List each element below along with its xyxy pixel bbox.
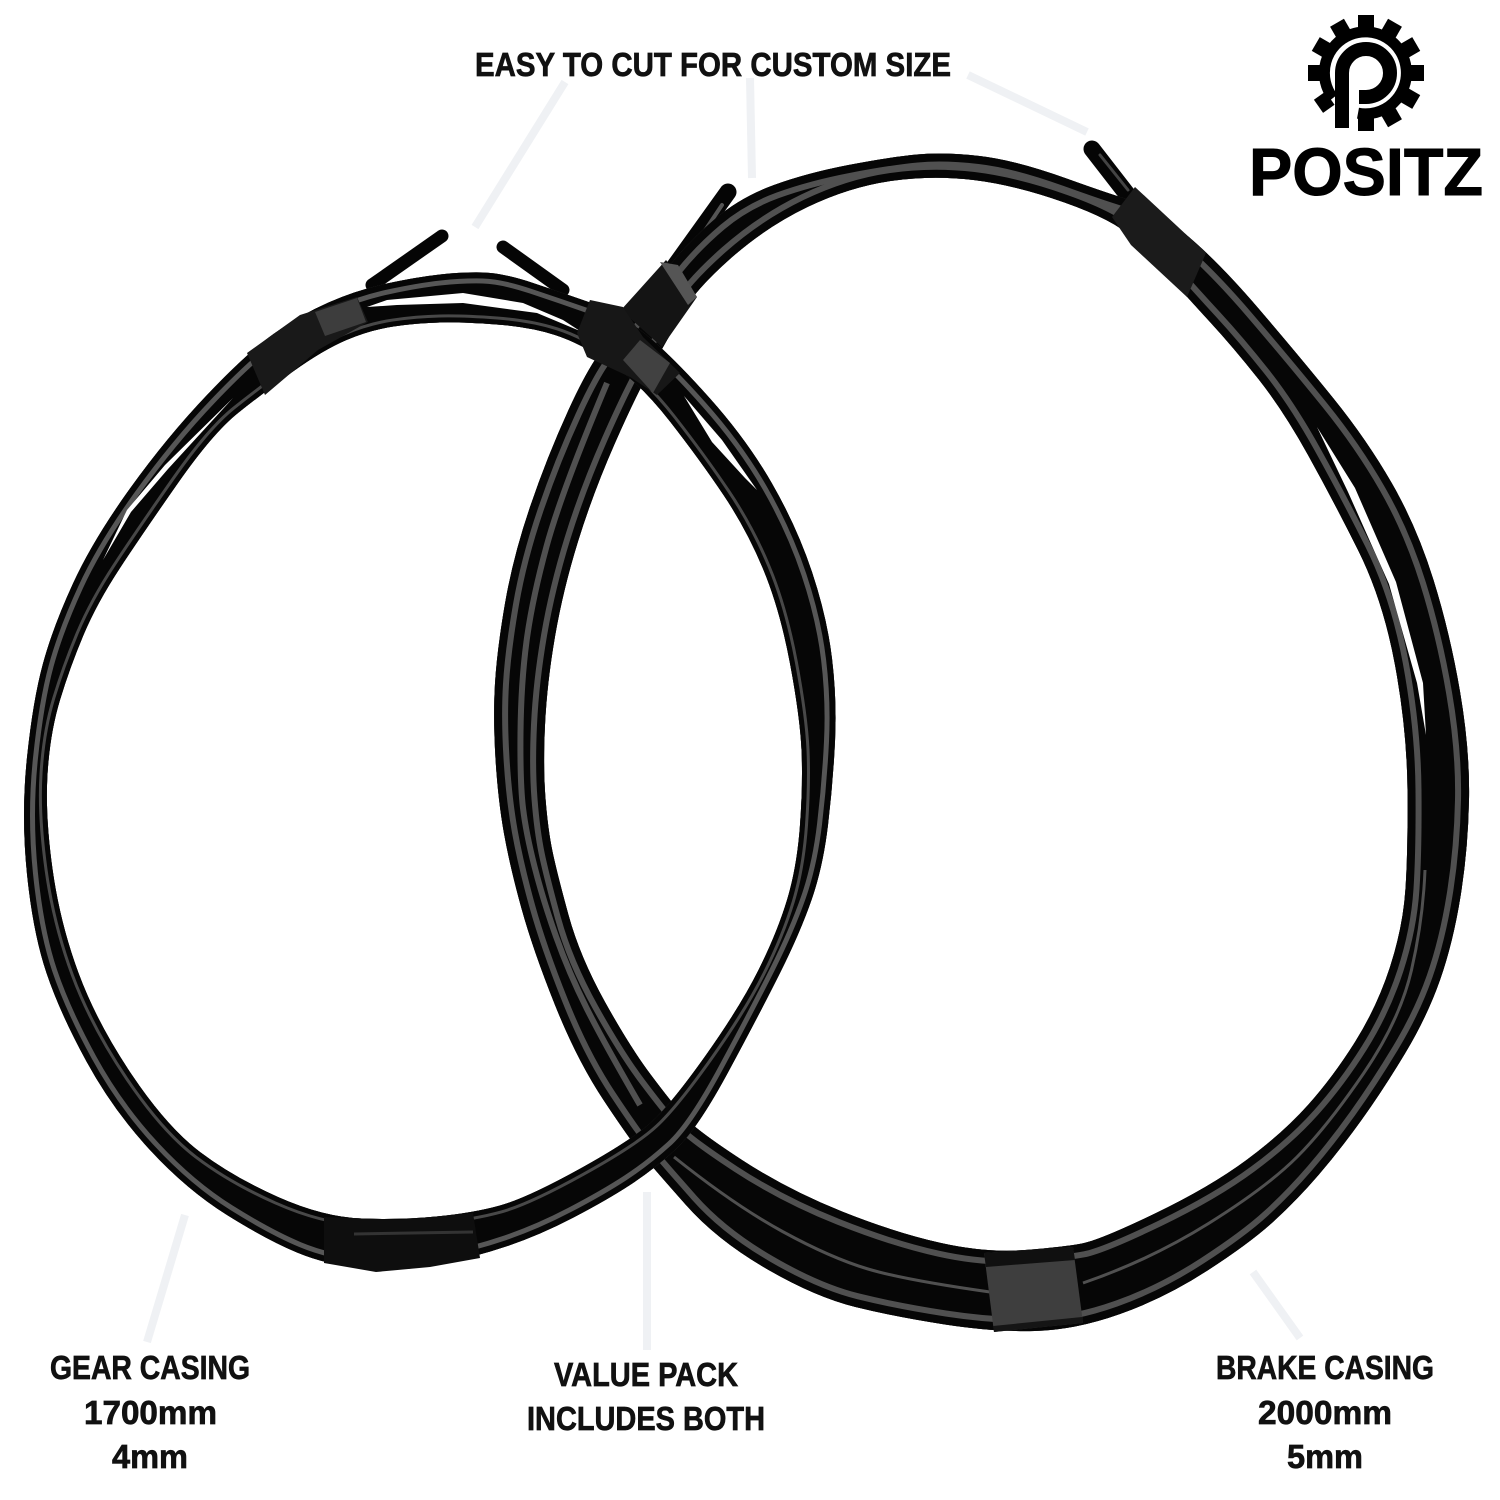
gear cable body [10, 260, 850, 1280]
arrow: pointer lines [147, 75, 1300, 1350]
tape: brake bottom [984, 1247, 1083, 1332]
label: value pack: INCLUDES BOTH [527, 1400, 765, 1437]
tape: gear bottom [324, 1213, 480, 1272]
label: brake casing [1216, 1349, 1434, 1475]
brake casing loop [480, 140, 1480, 1340]
brake cable middle stripes [520, 383, 1425, 1292]
brake cable slit [1317, 427, 1426, 735]
icon: gear with letter P [1308, 15, 1424, 131]
tape: gear top left [247, 297, 368, 395]
tape: brake top right [1112, 187, 1206, 297]
gear cable slits [103, 293, 757, 560]
label: gear casing: 1700mm [84, 1394, 217, 1431]
label: brake casing: BRAKE CASING [1216, 1349, 1434, 1386]
logo: Positz [1249, 15, 1483, 210]
label: gear casing [50, 1349, 250, 1475]
gear casing loop [10, 236, 850, 1280]
cable cut ends: gear [372, 236, 563, 290]
label: brake casing: 5mm [1287, 1438, 1363, 1475]
brand name: POSITZ [1249, 135, 1483, 210]
tape: gear crossing [577, 300, 680, 395]
cable cut ends: brake [672, 149, 1130, 270]
label: brake casing: 2000mm [1258, 1394, 1392, 1431]
heading: easy to cut: EASY TO CUT FOR CUSTOM SIZE [475, 46, 951, 83]
label: gear casing: 4mm [112, 1438, 188, 1475]
brake cable body [480, 140, 1480, 1340]
tape: brake near crossing [621, 260, 697, 347]
label: gear casing: GEAR CASING [50, 1349, 250, 1386]
label: value pack: VALUE PACK [554, 1356, 738, 1393]
label: value pack [527, 1356, 765, 1437]
